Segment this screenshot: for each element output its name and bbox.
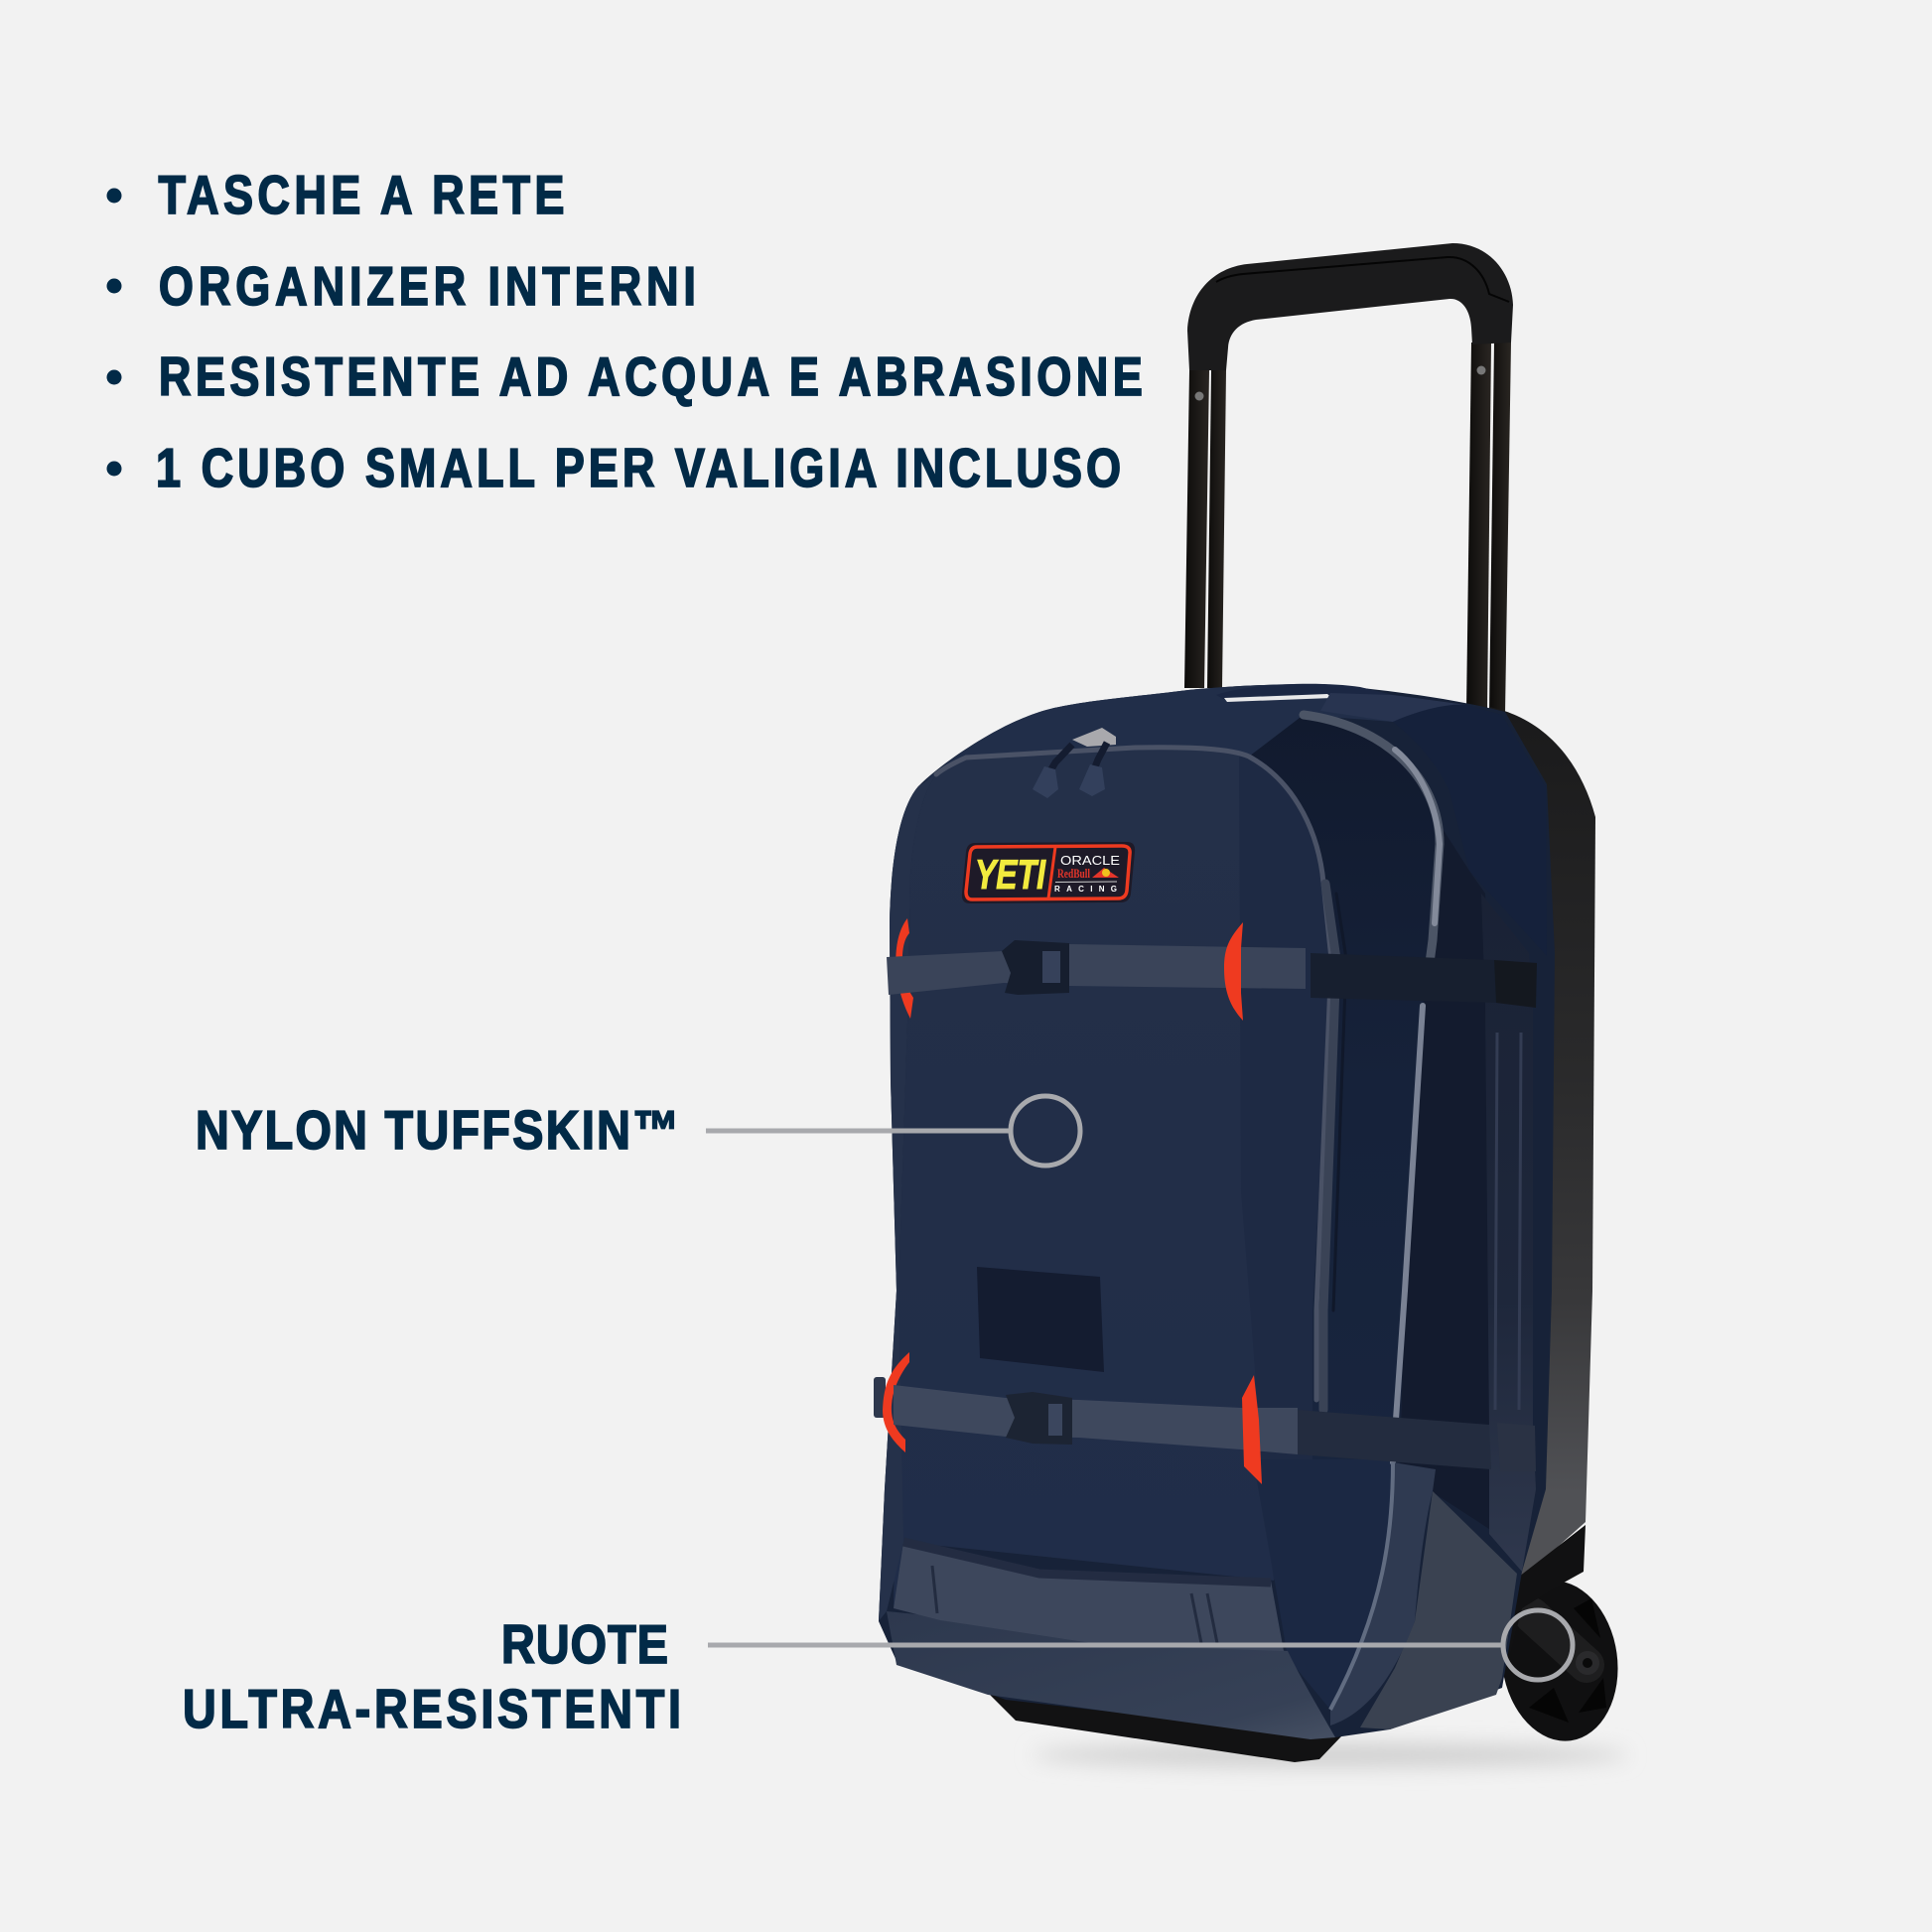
rear side pocket: [1400, 824, 1489, 1529]
bottom webbing strap: [894, 1542, 1284, 1651]
feature list: [107, 164, 1143, 498]
zipper trims: [936, 715, 1440, 1462]
label: ULTRA-RESISTENTI: [183, 1678, 681, 1739]
label: [183, 1613, 681, 1739]
corner rim band: [1330, 1462, 1436, 1725]
callout: ruote: [183, 1610, 1573, 1739]
velcro patch: [977, 1267, 1104, 1372]
bullet: cubo small: 1 CUBO SMALL PER VALIGIA INCLUSO: [156, 437, 1121, 498]
wheel arm: [1532, 1615, 1587, 1665]
upper strap assembly: [887, 918, 1537, 1021]
wheel spokes: [1529, 1598, 1606, 1723]
front panel: [894, 748, 1331, 1608]
handle poles: [1184, 343, 1511, 715]
red loop right: [1224, 922, 1243, 1021]
wheel housing: [1494, 1525, 1586, 1678]
black base: [988, 1693, 1342, 1762]
lower front corner: [1253, 1459, 1415, 1710]
hard shell: [1489, 707, 1595, 1579]
brand patch: YETI: [975, 851, 1046, 897]
soft bag body: [879, 684, 1555, 1737]
buckle: [1006, 1392, 1072, 1445]
side carry strap: [1481, 894, 1536, 1572]
handle grip: [1187, 243, 1513, 370]
buckle: [1002, 940, 1069, 995]
lower strap assembly: [874, 1352, 1536, 1484]
brand patch: [962, 842, 1135, 903]
product: suitcase: [874, 243, 1628, 1767]
lower grey panel: [1360, 1491, 1517, 1729]
bullet: organizer interni: ORGANIZER INTERNI: [159, 255, 696, 317]
front panel left edge: [879, 774, 936, 1621]
zipper pulls: [1033, 728, 1116, 798]
label: NYLON TUFFSKIN™: [196, 1099, 679, 1161]
telescopic handle: [1184, 243, 1513, 715]
label: RUOTE: [501, 1613, 668, 1675]
leader line: [708, 1642, 1502, 1648]
callout: nylon tuffskin: [196, 1096, 1080, 1166]
brand patch: ORACLE: [1060, 853, 1120, 868]
webbing dark side: [1311, 953, 1496, 1003]
webbing: [887, 944, 1306, 995]
bullet: tasche a rete: TASCHE A RETE: [158, 164, 565, 225]
brand patch: RACING: [1054, 885, 1117, 894]
red loop left: [896, 918, 913, 1019]
bullet: resistente: RESISTENTE AD ACQUA E ABRASIONE: [159, 345, 1143, 407]
top panel: [923, 684, 1393, 782]
front panel right section: [1239, 753, 1331, 1581]
top light band: [1320, 693, 1466, 722]
top carry handle: [1216, 684, 1393, 703]
side gusset: [1249, 715, 1440, 1462]
rear wheel: [1491, 1574, 1628, 1748]
webbing dark side: [1298, 1410, 1491, 1469]
red loop left: [883, 1352, 909, 1452]
ring marker: [1011, 1096, 1080, 1166]
webbing: [894, 1385, 1298, 1454]
corner rim highlight: [1330, 1462, 1393, 1710]
back shoulder panel: [1393, 705, 1547, 956]
ring marker: [1503, 1610, 1573, 1680]
strap clip: [1494, 960, 1537, 1008]
strap clip: [1497, 1423, 1536, 1471]
red loop right: [1242, 1375, 1262, 1484]
leader line: [706, 1128, 1009, 1134]
bottom rubber panel: [887, 1611, 1335, 1739]
ground shadow: [1033, 1743, 1628, 1767]
side tab: [874, 1377, 886, 1418]
brand patch: RedBull: [1057, 866, 1090, 881]
